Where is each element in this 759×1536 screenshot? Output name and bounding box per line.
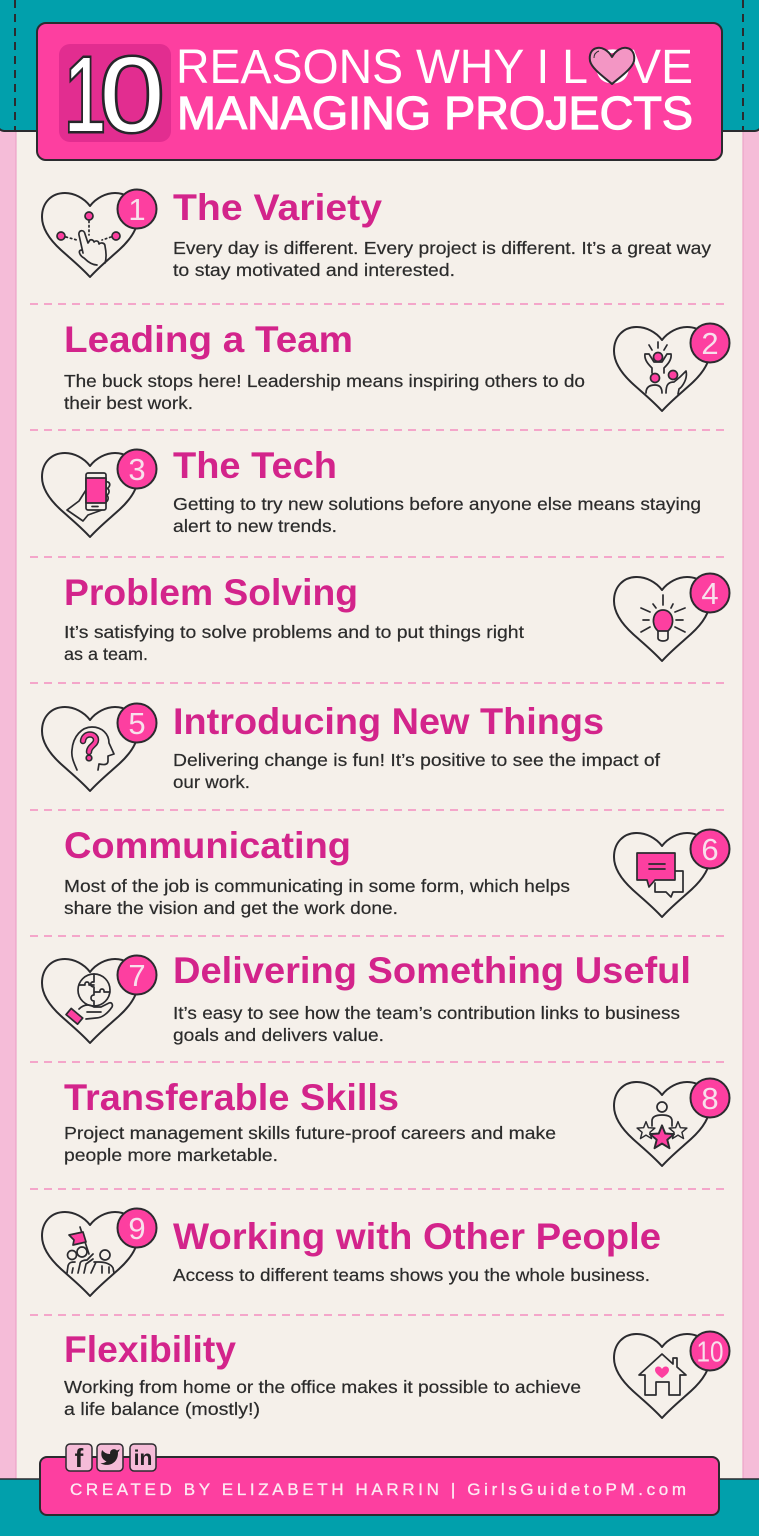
title: VE — [629, 41, 693, 94]
reason 3: The Tech — [42, 445, 701, 537]
reason 1: The Variety — [42, 187, 711, 280]
body text: Working from home or the office makes it possible to achieve — [64, 1377, 581, 1397]
icon: linkedin: in — [134, 1447, 152, 1470]
icon: heart with person and stars: 8 — [701, 1081, 719, 1116]
number badge: 10: 0 — [100, 36, 164, 154]
body text: to stay motivated and interested. — [173, 260, 455, 280]
reason 10: Flexibility — [64, 1329, 730, 1419]
body text: their best work. — [64, 393, 193, 413]
heading: Leading a Team — [64, 319, 353, 360]
heading: The Tech — [173, 445, 337, 486]
dividers — [30, 304, 726, 1315]
icon: heart with chat bubbles: 6 — [701, 832, 719, 867]
body text — [64, 876, 570, 918]
body text — [64, 371, 585, 413]
body text — [173, 750, 660, 792]
footer credit: CREATED BY ELIZABETH HARRIN | GirlsGuidetoPM.com — [70, 1480, 686, 1499]
icon: facebook: f — [75, 1443, 84, 1473]
title: REASONS WHY I L — [176, 41, 588, 94]
reason 5: Introducing New Things — [42, 701, 660, 792]
title — [176, 41, 693, 139]
body text: goals and delivers value. — [173, 1025, 384, 1045]
icon: title heart — [590, 48, 634, 84]
reason 4: Problem Solving — [64, 572, 730, 664]
top teal band — [0, 0, 759, 131]
header banner — [37, 23, 722, 160]
title: O — [594, 41, 631, 94]
body text: alert to new trends. — [173, 516, 337, 536]
reason 9: Working with Other People — [42, 1208, 661, 1296]
icon: heart with head and question mark: 5 — [128, 706, 146, 741]
icon: heart with pointing hand — [42, 190, 156, 277]
body text: as a team. — [64, 644, 148, 664]
icon: heart with house — [614, 1332, 730, 1418]
body text: It’s satisfying to solve problems and to put things right — [64, 622, 524, 642]
icon: heart with person and stars — [614, 1078, 730, 1166]
body text: a life balance (mostly!) — [64, 1399, 260, 1419]
icon: twitter — [97, 1444, 123, 1471]
body text: share the vision and get the work done. — [64, 898, 398, 918]
icon: heart with house: 10 — [696, 1336, 724, 1368]
body text — [173, 238, 711, 280]
icon: heart with light bulb — [614, 574, 730, 661]
body text — [64, 1377, 581, 1419]
body text: Most of the job is communicating in some form, which helps — [64, 876, 570, 896]
footer banner — [40, 1457, 719, 1515]
icon: heart with puzzle in hand: 7 — [128, 958, 146, 993]
body text: It’s easy to see how the team’s contribution links to business — [173, 1003, 680, 1023]
body text — [64, 1123, 556, 1165]
heading: The Variety — [173, 187, 382, 228]
heading: Working with Other People — [173, 1216, 661, 1257]
body text: The buck stops here! Leadership means inspiring others to do — [64, 371, 585, 391]
heading: Problem Solving — [64, 572, 358, 613]
icon: heart with phone in hand: 3 — [128, 452, 146, 487]
icon: heart with head and question mark — [42, 704, 156, 791]
body text: Getting to try new solutions before anyone else means staying — [173, 494, 701, 514]
body text: Project management skills future-proof careers and make — [64, 1123, 556, 1143]
bottom teal band — [0, 1479, 759, 1536]
reason 8: Transferable Skills — [64, 1077, 730, 1166]
body text: Every day is different. Every project is different. It’s a great way — [173, 238, 711, 258]
icon: heart with phone in hand — [42, 450, 156, 537]
body text — [64, 622, 524, 664]
body text: Delivering change is fun! It’s positive to see the impact of — [173, 750, 660, 770]
icon: heart with chat bubbles — [614, 830, 730, 917]
social icons — [66, 1443, 156, 1473]
reason 6: Communicating — [64, 825, 730, 918]
icon: heart with puzzle in hand — [42, 956, 156, 1043]
reason 2: Leading a Team — [64, 319, 730, 413]
icon: heart with light bulb: 4 — [701, 576, 719, 611]
heading: Flexibility — [64, 1329, 236, 1370]
heading: Introducing New Things — [173, 701, 604, 742]
icon: heart with team leader — [614, 324, 730, 411]
heading: Communicating — [64, 825, 351, 866]
number badge: 10 — [59, 36, 171, 154]
icon: heart with people and flag — [42, 1208, 156, 1296]
body text — [173, 494, 701, 536]
icon: heart with pointing hand: 1 — [128, 192, 146, 227]
reason 7: Delivering Something Useful — [42, 950, 691, 1045]
heading: Transferable Skills — [64, 1077, 399, 1118]
body text: our work. — [173, 772, 250, 792]
body text: people more marketable. — [64, 1145, 278, 1165]
heading: Delivering Something Useful — [173, 950, 691, 991]
icon: heart with people and flag: 9 — [128, 1211, 146, 1246]
number badge: 10: 1 — [64, 36, 106, 154]
body text: Access to different teams shows you the whole business. — [173, 1265, 650, 1285]
body text — [173, 1003, 680, 1045]
title: MANAGING PROJECTS — [177, 87, 693, 139]
icon: heart with team leader: 2 — [701, 326, 719, 361]
